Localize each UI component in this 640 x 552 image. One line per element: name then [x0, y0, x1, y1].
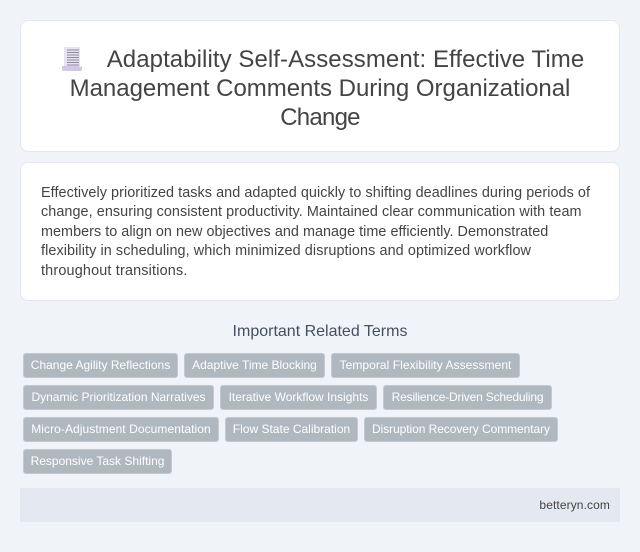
summary line 4: flexibility in scheduling, which minimized disruptions and optimized workflow [41, 243, 531, 259]
related terms tags [23, 353, 558, 474]
tag [383, 385, 552, 410]
tag [331, 353, 520, 378]
tag: Change Agility Reflections [31, 358, 170, 372]
tag [23, 417, 219, 442]
summary line 1: Effectively prioritized tasks and adapted quickly to shifting deadlines during periods of [41, 184, 590, 200]
icon: scroll document [62, 47, 82, 71]
title [62, 46, 584, 131]
tag [23, 353, 178, 378]
tag: Flow State Calibration [233, 422, 350, 436]
title card [20, 20, 620, 152]
tag: Resilience-Driven Scheduling [392, 390, 543, 404]
footer bar [20, 488, 620, 522]
tag: Temporal Flexibility Assessment [340, 358, 511, 372]
title line 2: Management Comments During Organizational [70, 75, 570, 102]
tag [364, 417, 558, 442]
summary text [41, 184, 590, 278]
tag: Micro-Adjustment Documentation [31, 422, 211, 436]
heading: related terms: Important Related Terms [233, 323, 407, 340]
tag [23, 449, 172, 474]
tag: Responsive Task Shifting [31, 454, 164, 468]
title line 1: Adaptability Self-Assessment: Effective Time [107, 46, 584, 73]
summary line 5: throughout transitions. [41, 262, 188, 278]
summary line 3: members to align on new objectives and manage time efficiently. Demonstrated [41, 224, 548, 240]
tag [184, 353, 325, 378]
summary line 2: change, ensuring consistent productivity. Maintained clear communication with team [41, 204, 582, 220]
tag [23, 385, 214, 410]
footer text: betteryn.com [539, 498, 610, 512]
tag: Dynamic Prioritization Narratives [31, 390, 206, 404]
title line 3: Change [280, 104, 360, 131]
tag [220, 385, 377, 410]
tag: Disruption Recovery Commentary [372, 422, 550, 436]
tag: Adaptive Time Blocking [192, 358, 317, 372]
tag: Iterative Workflow Insights [229, 390, 368, 404]
summary card [20, 162, 620, 301]
tag [225, 417, 358, 442]
